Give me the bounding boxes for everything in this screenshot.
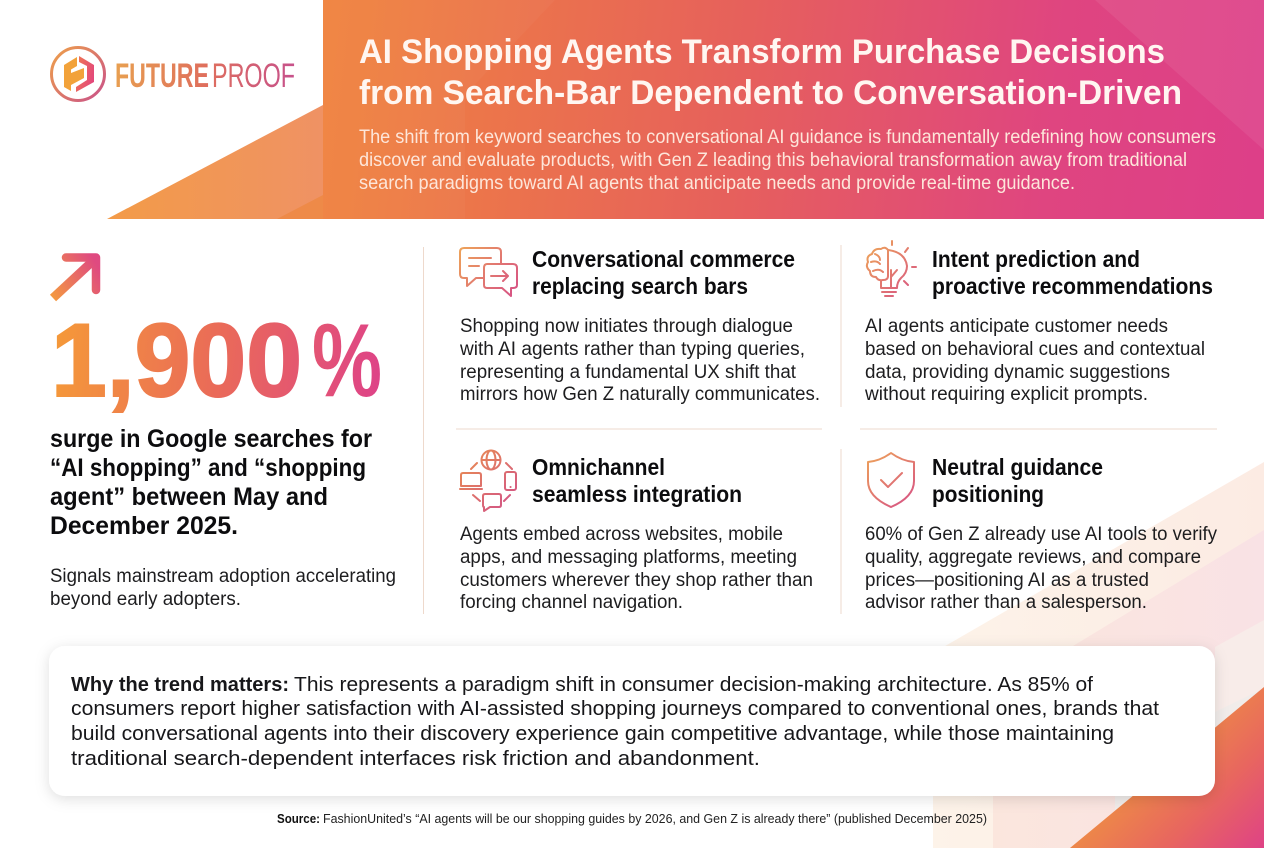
body text: prices—positioning AI as a trusted [865,570,1149,591]
title [359,33,1182,112]
logo: FutureProof: FUTURE [115,57,209,95]
body text: AI agents anticipate customer needs [865,316,1168,337]
body text: 60% of Gen Z already use AI tools to verify [865,524,1217,545]
heading: replacing search bars [532,273,748,299]
body text: based on behavioral cues and contextual [865,339,1205,360]
callout: why the trend matters: traditional search-dependent interfaces risk friction and abandonment. [71,747,760,770]
heading: proactive recommendations [932,273,1213,299]
callout: why the trend matters [49,646,1215,796]
body text [865,524,1217,613]
statistic description: surge in Google searches for [50,425,372,453]
callout: why the trend matters: Why the trend matters: [71,673,289,696]
heading: positioning [932,481,1044,507]
panel: key statistic [50,258,396,610]
header banner [107,0,1264,219]
body text: without requiring explicit prompts. [864,384,1148,405]
source line: Source: [277,812,320,826]
body text: apps, and messaging platforms, meeting [460,547,797,568]
statistic description [50,425,372,540]
statistic note: Signals mainstream adoption accelerating [50,566,396,587]
big number 1,900%: % [312,303,382,419]
body text: mirrors how Gen Z naturally communicates. [460,384,820,405]
body text: with AI agents rather than typing queries, [459,339,805,360]
statistic note [50,566,396,610]
logo: FutureProof [52,48,295,100]
panel: neutral guidance [865,453,1217,613]
heading: Omnichannel [532,454,665,480]
subtitle: discover and evaluate products, with Gen Z leading this behavioral transformation away from traditional [359,149,1187,171]
body text: advisor rather than a salesperson. [865,592,1147,613]
heading [932,454,1103,507]
title: AI Shopping Agents Transform Purchase Decisions [359,33,1165,71]
heading [532,454,742,507]
subtitle: search paradigms toward AI agents that anticipate needs and provide real-time guidance. [359,172,1075,194]
body text: quality, aggregate reviews, and compare [865,547,1201,568]
icon: chat bubbles [460,248,517,296]
statistic description: December 2025. [50,512,238,540]
statistic note: beyond early adopters. [50,589,241,610]
body text [864,316,1205,405]
heading: Intent prediction and [932,246,1140,272]
logo: FutureProof: PROOF [212,57,295,95]
icon: connected devices [460,450,516,511]
heading: Neutral guidance [932,454,1103,480]
body text [459,316,820,405]
big number 1,900%: 1,900 [51,303,302,419]
body text: Agents embed across websites, mobile [460,524,783,545]
callout: why the trend matters: consumers report higher satisfaction with AI-assisted shopping journeys compared to conventional ones, brands that [71,697,1159,720]
bottom-right background facets [933,462,1264,848]
statistic description: agent” between May and [50,483,328,511]
panel: conversational commerce [459,246,820,405]
callout: why the trend matters: This represents a paradigm shift in consumer decision-making architecture. As 85% of [294,673,1093,696]
body text: representing a fundamental UX shift that [460,362,797,383]
source line: FashionUnited’s “AI agents will be our shopping guides by 2026, and Gen Z is already there” (published December 2025) [323,812,987,826]
subtitle [359,126,1216,194]
title: from Search-Bar Dependent to Conversation-Driven [359,74,1182,112]
icon: up-right arrow [53,258,96,298]
subtitle: The shift from keyword searches to conversational AI guidance is fundamentally redefining how consumers [359,126,1216,148]
body text [460,524,813,613]
icon: brain lightbulb [867,241,916,296]
statistic description: “AI shopping” and “shopping [50,454,366,482]
heading: Conversational commerce [532,246,795,272]
body text: forcing channel navigation. [460,592,683,613]
heading [532,246,795,299]
icon: shield with check [868,453,914,507]
body text: customers wherever they shop rather than [460,570,813,591]
body text: Shopping now initiates through dialogue [460,316,793,337]
panel: intent prediction [864,241,1213,405]
heading [932,246,1213,299]
panel: omnichannel integration [460,450,813,613]
callout: why the trend matters: build conversational agents into their discovery experience gain competitive advantage, while those maintaining [71,722,1114,745]
body text: data, providing dynamic suggestions [865,362,1170,383]
heading: seamless integration [532,481,742,507]
